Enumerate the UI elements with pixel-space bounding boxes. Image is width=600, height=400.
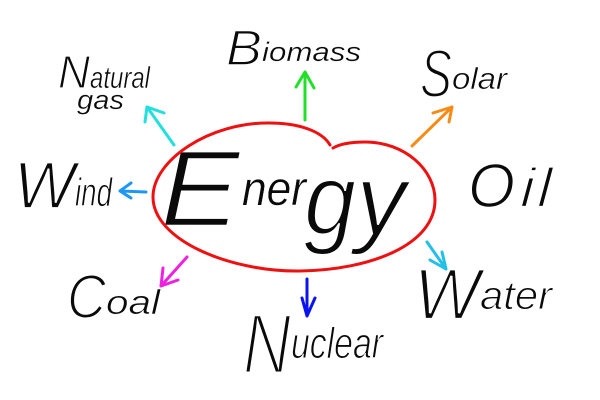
label: Wind: W <box>14 148 81 222</box>
label: Natural gas: N <box>58 46 91 98</box>
label: Nuclear: N <box>243 297 291 391</box>
title: Energy: E <box>160 128 241 250</box>
title: Energy: g <box>304 144 356 256</box>
title: Energy: ner <box>242 163 308 216</box>
label: Solar: S <box>420 36 452 112</box>
label: Natural gas: atural <box>90 60 151 95</box>
arrow: to Water <box>427 242 446 269</box>
arrow: to Biomass <box>296 72 314 120</box>
label: Coal: oal <box>106 284 162 322</box>
label: Nuclear: uclear <box>291 319 385 368</box>
label: Oil: il <box>519 156 555 219</box>
arrow: to Wind <box>120 183 146 198</box>
title: Energy: y <box>350 144 412 256</box>
label: Water: ater <box>480 274 554 318</box>
label: Natural gas: gas <box>77 85 124 115</box>
label: Biomass: B <box>226 20 262 76</box>
arrow: to Nuclear <box>302 279 315 316</box>
label: Wind: ind <box>75 171 113 215</box>
label: Solar: olar <box>452 61 509 96</box>
arrow: to Natural gas <box>145 107 174 145</box>
label: Water: W <box>414 255 486 335</box>
label: Biomass: iomass <box>262 37 361 67</box>
red hand-drawn outline around Energy <box>153 123 435 271</box>
label: Coal: C <box>67 263 107 332</box>
label: Oil: O <box>468 152 515 221</box>
arrow: to Solar <box>412 107 452 146</box>
arrow: to Coal <box>161 257 187 286</box>
